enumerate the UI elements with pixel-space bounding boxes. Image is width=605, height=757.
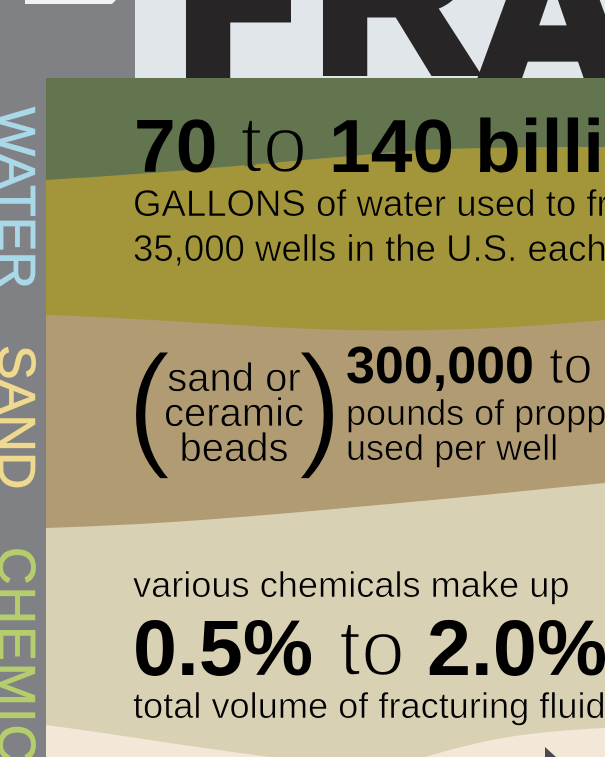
- earth layer: pale: [46, 725, 605, 757]
- earth layer: cream: [46, 483, 605, 757]
- sand description: beads: [180, 426, 288, 470]
- water headline: 140 billi: [329, 104, 604, 188]
- sand headline: 300,000: [346, 337, 534, 395]
- left parenthesis: (: [126, 327, 172, 481]
- earth layer: olive: [46, 147, 605, 340]
- sidebar labels: [0, 106, 36, 757]
- chemicals headline: to: [339, 603, 405, 692]
- sand headline: to: [549, 337, 592, 395]
- title: FRA: [186, 0, 605, 78]
- earth layer: green: [46, 78, 605, 188]
- chemicals headline: 2.0%: [427, 603, 605, 692]
- water headline: to: [240, 100, 308, 190]
- chemicals intro: various chemicals make up: [133, 564, 569, 605]
- sand description: sand or: [167, 356, 301, 400]
- sand description: ceramic: [164, 391, 304, 435]
- water headline: 70: [134, 104, 217, 188]
- chemicals description: total volume of fracturing fluid: [133, 685, 605, 726]
- proppant description: pounds of propp: [346, 392, 605, 433]
- earth layer: tan: [46, 315, 605, 540]
- chemicals headline: 0.5%: [133, 603, 313, 692]
- white header fragment: [25, 0, 116, 4]
- chemicals stat: [133, 564, 605, 726]
- proppant description: used per well: [346, 427, 558, 468]
- sand stat: [126, 327, 605, 481]
- water description: GALLONS of water used to fr: [133, 183, 605, 224]
- water stat: [133, 100, 605, 269]
- drill arrow tip: [545, 747, 556, 757]
- gray sidebar and header block: [0, 0, 135, 757]
- right parenthesis: ): [297, 327, 343, 481]
- water description: 35,000 wells in the U.S. each: [133, 228, 605, 269]
